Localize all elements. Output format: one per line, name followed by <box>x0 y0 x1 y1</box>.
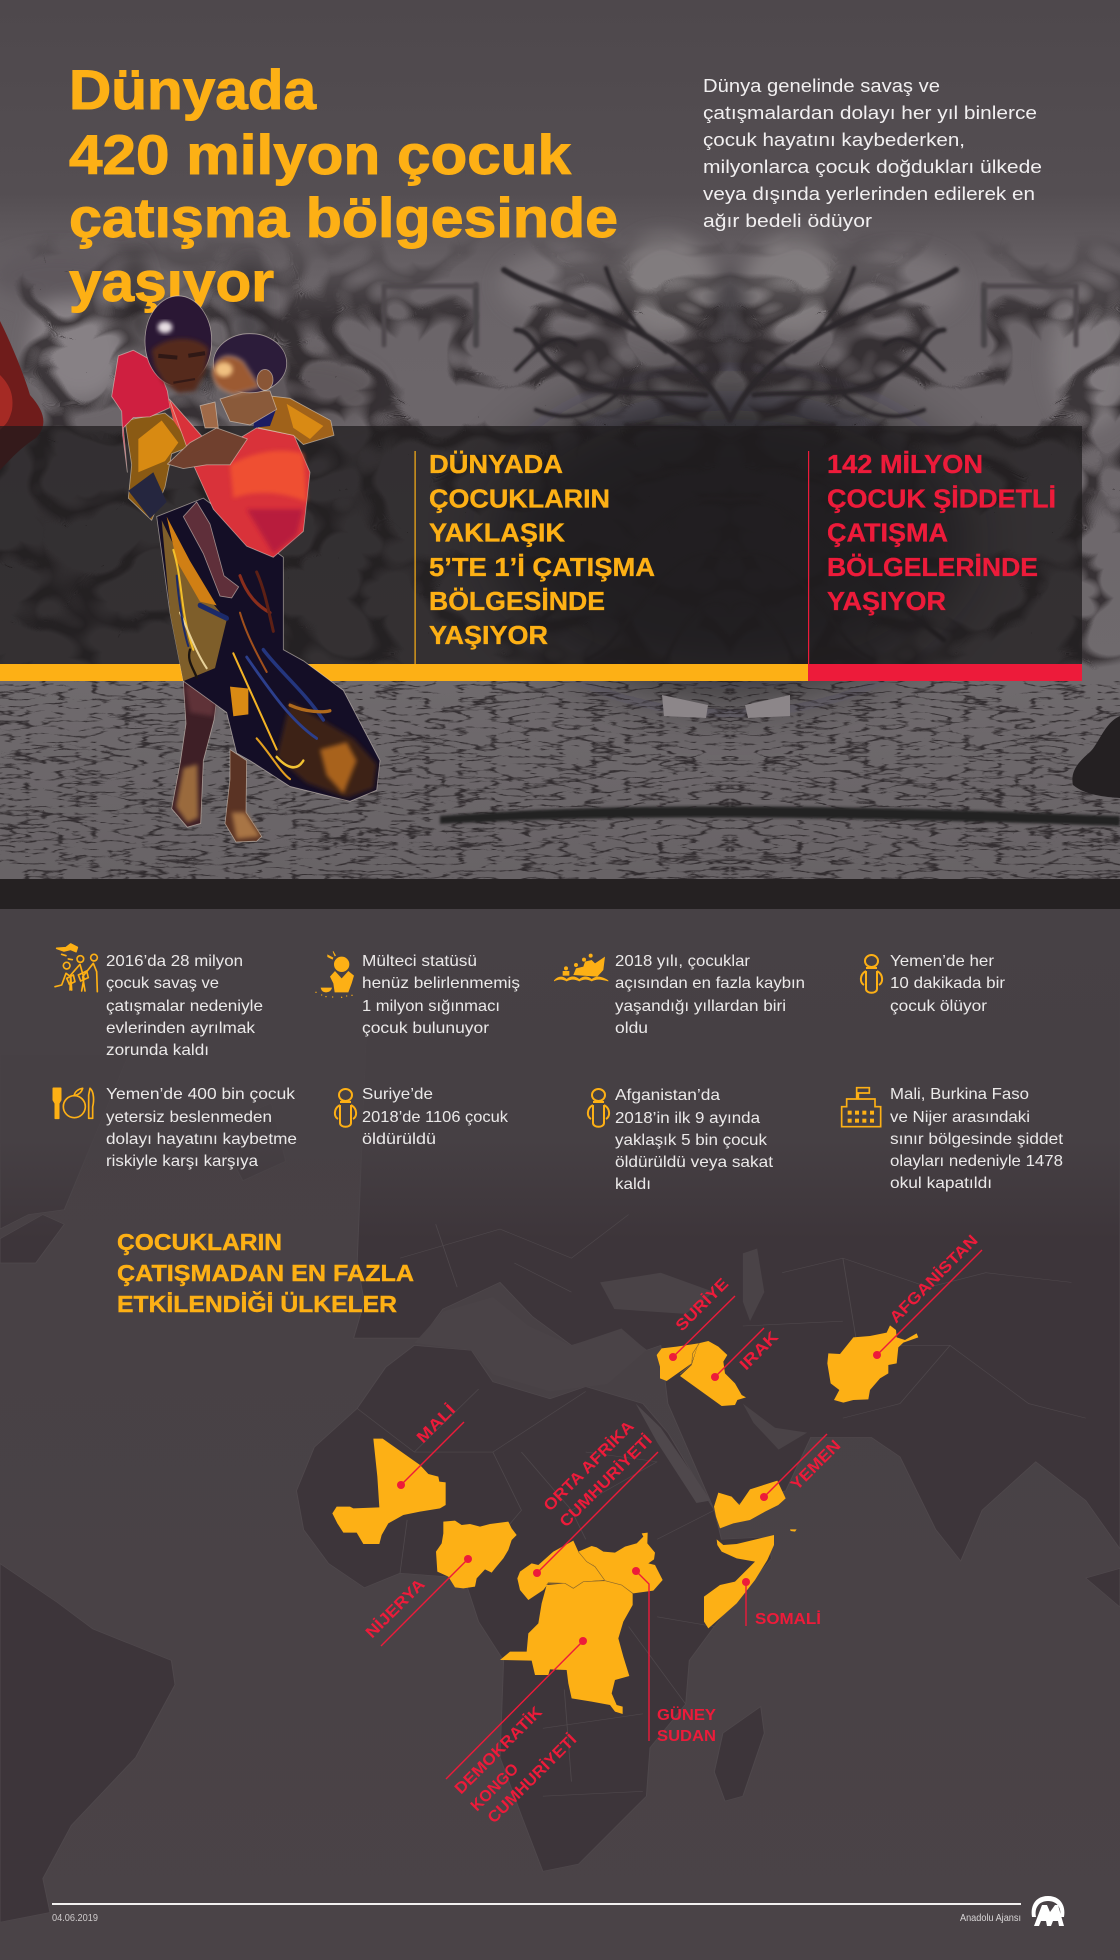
fact: displaced children <box>55 944 263 1059</box>
icon: child outline <box>335 1089 356 1127</box>
fact: Afghanistan child casualties: yaklaşık 5 bin çocuk <box>615 1132 768 1149</box>
fact: deadly year: oldu <box>615 1020 648 1037</box>
fact: unregistered refugees: Mülteci statüsü <box>362 953 477 970</box>
land: Eurasia <box>354 899 1120 1561</box>
agency name: Anadolu Ajansı <box>960 1912 1021 1924</box>
fact: Yemen child deaths: 10 dakikada bir <box>890 975 1006 992</box>
label: Syria: SURİYE <box>672 1274 732 1335</box>
icon: child outline <box>588 1089 609 1127</box>
map section heading: ÇATIŞMADAN EN FAZLA <box>117 1260 414 1286</box>
fact: displaced children: evlerinden ayrılmak <box>106 1020 256 1037</box>
icon: school building <box>842 1088 881 1127</box>
intro text: ağır bedeli ödüyor <box>703 210 872 231</box>
fact: deadly year <box>554 953 805 1037</box>
left red face fragment <box>0 321 43 470</box>
footer <box>52 1896 1064 1926</box>
dark separator band <box>0 879 1120 909</box>
icon: sitting child with bowl <box>315 951 354 998</box>
statistic: 142 million: ÇOCUK ŞİDDETLİ <box>827 484 1056 514</box>
land: Madagascar <box>714 1707 764 1801</box>
fact: unregistered refugees: çocuk bulunuyor <box>362 1020 490 1037</box>
fact: Afghanistan child casualties: Afganistan’da <box>615 1087 720 1104</box>
world map background <box>0 899 1120 1922</box>
fact: Yemen child deaths <box>861 953 1006 1015</box>
fact: displaced children: zorunda kaldı <box>106 1042 209 1059</box>
label: South Sudan: GÜNEY <box>657 1705 716 1724</box>
label: Afghanistan: AFGANİSTAN <box>886 1231 982 1327</box>
fact: Afghanistan child casualties: kaldı <box>615 1176 651 1193</box>
fact: displaced children: çocuk savaş ve <box>106 975 219 992</box>
texture: painterly veins <box>0 230 1120 670</box>
label: Central African Republic: ORTA AFRİKA <box>540 1417 638 1515</box>
fact: school closures: olayları nedeniyle 1478 <box>890 1153 1063 1170</box>
intro text: milyonlarca çocuk doğdukları ülkede <box>703 156 1042 177</box>
fact: Yemen child deaths: çocuk ölüyor <box>890 998 988 1015</box>
icon: boat on waves <box>554 954 608 981</box>
intro text: çocuk hayatını kaybederken, <box>703 129 965 150</box>
map section heading: ETKİLENDİĞİ ÜLKELER <box>117 1290 397 1317</box>
title <box>69 58 618 313</box>
fact: school closures: okul kapatıldı <box>890 1175 992 1192</box>
fact: school closures: Mali, Burkina Faso <box>890 1086 1029 1103</box>
map: highlighted Asian and Horn of Africa countries <box>657 1325 918 1628</box>
girl head <box>145 296 212 386</box>
statistic: one in five children: 5’TE 1’İ ÇATIŞMA <box>429 552 655 582</box>
fact: Yemen malnutrition: dolayı hayatını kaybetme <box>106 1131 297 1148</box>
map section heading <box>117 1229 414 1317</box>
map: highlighted African countries <box>332 1439 663 1714</box>
title: Dünyada <box>69 58 317 121</box>
intro text: veya dışında yerlerinden edilerek en <box>703 183 1035 204</box>
statistic: 142 million: BÖLGELERİNDE <box>827 552 1038 582</box>
baby head <box>213 334 287 393</box>
facts grid <box>53 944 1064 1193</box>
title: çatışma bölgesinde <box>69 186 618 249</box>
map callouts <box>362 1231 982 1827</box>
country: Central African Republic <box>517 1541 605 1600</box>
country: Mali <box>332 1439 446 1544</box>
logo: Anadolu Agency <box>1032 1896 1064 1926</box>
fact: Afghanistan child casualties: öldürüldü veya sakat <box>615 1154 774 1171</box>
statistic: 142 million: 142 MİLYON <box>827 449 983 479</box>
fact: Syria child deaths <box>335 1086 509 1148</box>
country: Democratic Republic of the Congo <box>500 1581 633 1714</box>
statistic: one in five children <box>429 449 655 650</box>
statistic: one in five children: BÖLGESİNDE <box>429 586 605 616</box>
country: Somalia <box>704 1535 774 1628</box>
fact: unregistered refugees: henüz belirlenmemiş <box>362 975 520 992</box>
fact: Afghanistan child casualties <box>588 1087 774 1193</box>
label: Nigeria: NİJERYA <box>362 1575 429 1642</box>
far leg and near leg <box>225 750 262 842</box>
land: South America <box>0 1564 175 1922</box>
fact: school closures <box>842 1086 1064 1192</box>
land: Indochina and Sri Lanka <box>1086 1568 1120 1607</box>
baby leg <box>183 502 239 598</box>
label: Iraq: IRAK <box>737 1328 782 1374</box>
statistic: 142 million: ÇATIŞMA <box>827 518 948 548</box>
label: Mali: MALİ <box>413 1401 459 1447</box>
label: Central African Republic: CUMHURİYETİ <box>556 1431 656 1531</box>
fact: Syria child deaths: Suriye’de <box>362 1086 433 1103</box>
fact: deadly year: açısından en fazla kaybın <box>615 975 805 992</box>
land: north-west islands <box>0 1055 129 1229</box>
fact: Syria child deaths: 2018’de 1106 çocuk <box>362 1109 509 1126</box>
right dark figure fragment <box>1072 716 1120 798</box>
intro text: çatışmalardan dolayı her yıl binlerce <box>703 102 1037 123</box>
fact: unregistered refugees: 1 milyon sığınmacı <box>362 998 500 1015</box>
label: DR Congo <box>451 1703 580 1827</box>
intro text: Dünya genelinde savaş ve <box>703 75 940 96</box>
fact: deadly year: 2018 yılı, çocuklar <box>615 953 751 970</box>
label: Somalia: SOMALİ <box>755 1610 821 1628</box>
fact: Syria child deaths: öldürüldü <box>362 1131 436 1148</box>
country: Syria <box>657 1343 698 1381</box>
fact: Yemen malnutrition: riskiyle karşı karşıya <box>106 1153 258 1170</box>
icon: child outline <box>861 955 882 993</box>
shoulder cloth <box>112 350 170 472</box>
fact: Yemen malnutrition: yetersiz beslenmeden <box>106 1109 272 1126</box>
country: Iraq <box>680 1341 746 1406</box>
fact: school closures: sınır bölgesinde şiddet <box>890 1131 1064 1148</box>
sling <box>169 399 310 557</box>
dress <box>157 498 380 801</box>
texture: painted ground <box>0 681 1120 879</box>
fact: Yemen malnutrition <box>53 1086 297 1170</box>
statistic: one in five children: YAŞIYOR <box>429 620 548 650</box>
fact: Afghanistan child casualties: 2018’in ilk 9 ayında <box>615 1110 760 1127</box>
country: Yemen <box>714 1481 786 1528</box>
intro text <box>703 75 1042 231</box>
title: yaşıyor <box>69 250 274 313</box>
statistic: one in five children: ÇOCUKLARIN <box>429 484 610 514</box>
icon: plane and fleeing family <box>55 944 97 992</box>
label: DR Congo: DEMOKRATİK <box>451 1703 546 1798</box>
country: South Sudan <box>578 1533 663 1593</box>
fact: unregistered refugees <box>315 951 520 1037</box>
sleeve of baby wrap <box>258 395 334 445</box>
fact: school closures: ve Nijer arasındaki <box>890 1109 1030 1126</box>
dress upper and sleeve <box>125 413 200 520</box>
illustration: girl carrying baby <box>112 296 380 842</box>
country: Nigeria <box>436 1521 517 1588</box>
fact: Yemen child deaths: Yemen’de her <box>890 953 995 970</box>
statistic: one in five children: YAKLAŞIK <box>429 518 565 548</box>
statistic: one in five children: DÜNYADA <box>429 449 563 479</box>
fact: deadly year: yaşandığı yıllardan biri <box>615 998 786 1015</box>
fact: displaced children: 2016’da 28 milyon <box>106 953 243 970</box>
label: DR Congo: CUMHURİYETİ <box>484 1731 580 1827</box>
statistic: 142 million: YAŞIYOR <box>827 586 946 616</box>
title: 420 milyon çocuk <box>69 123 572 186</box>
label: DR Congo: KONGO <box>468 1760 522 1815</box>
land: Africa <box>296 1345 771 1871</box>
label: Yemen: YEMEN <box>788 1437 844 1494</box>
statistic: 142 million <box>827 449 1056 616</box>
map section heading: ÇOCUKLARIN <box>117 1229 282 1255</box>
date: 04.06.2019 <box>52 1912 98 1924</box>
hands <box>220 391 277 425</box>
country: Afghanistan <box>827 1325 918 1403</box>
label: South Sudan: SUDAN <box>657 1728 716 1745</box>
label: Central African Republic <box>540 1417 656 1531</box>
hero photo background <box>0 0 1120 879</box>
icon: plate, fork and knife <box>53 1088 94 1118</box>
label: South Sudan <box>657 1705 716 1745</box>
fact: Yemen malnutrition: Yemen’de 400 bin çocuk <box>106 1086 296 1103</box>
panel: statistics band <box>0 426 1082 681</box>
fact: displaced children: çatışmalar nedeniyle <box>106 998 263 1015</box>
